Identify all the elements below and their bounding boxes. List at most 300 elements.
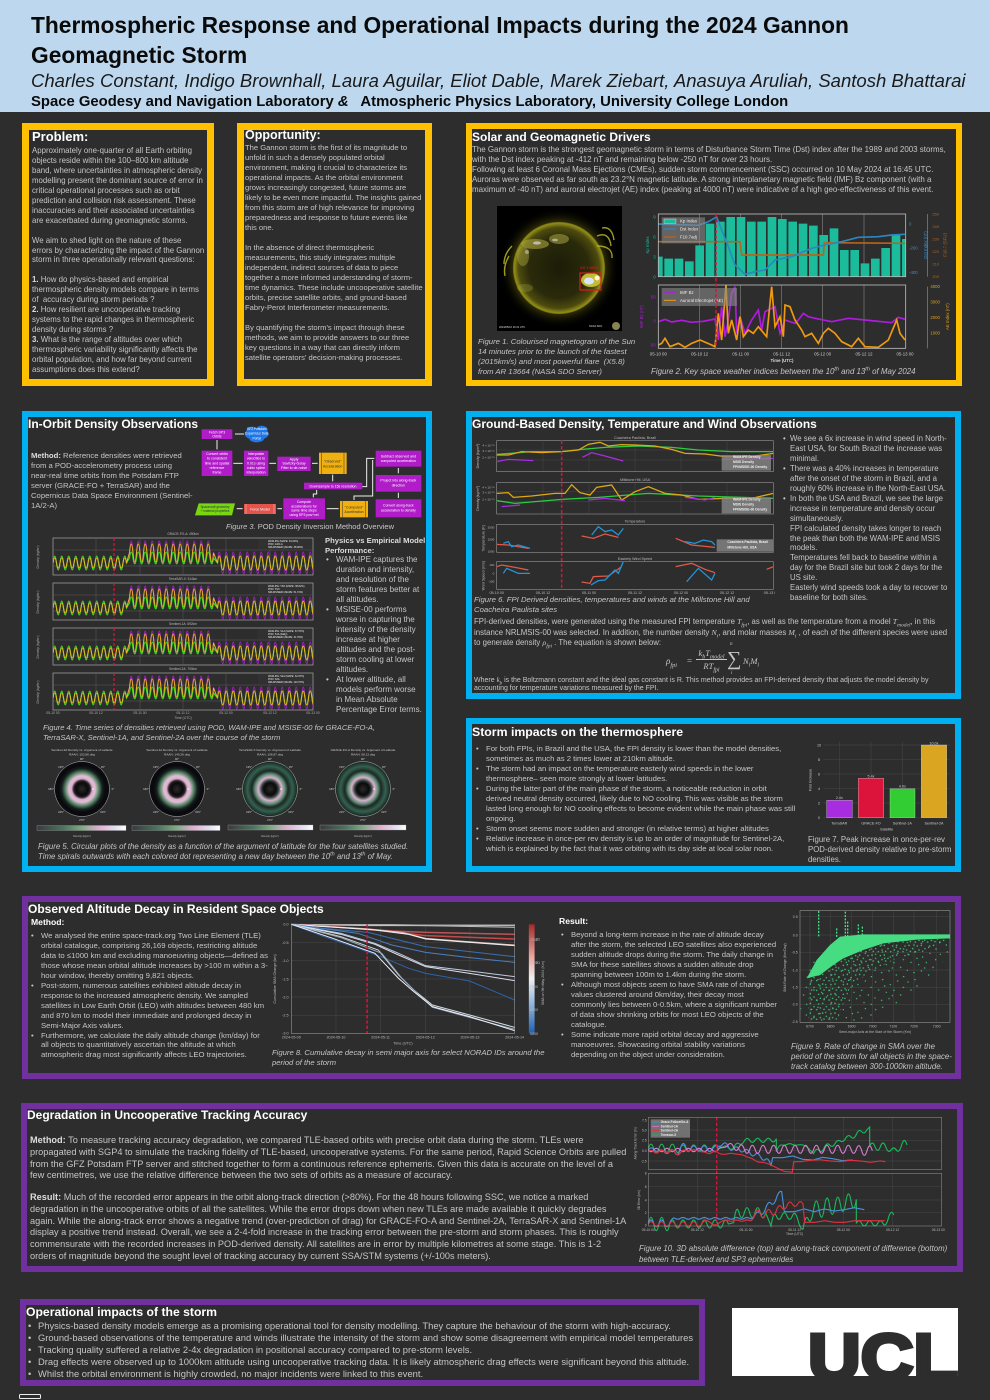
text: decay method: satellites in Low Earth Orbit (LEO) with altitudes between 480 km (41, 1001, 264, 1010)
figure 4: density time series: POD: S2A (268, 678, 280, 681)
figure 8: cumulative SMA change chart: 2024-05-11 (371, 1036, 390, 1040)
figure 5: polar density plots: 270° (174, 818, 180, 822)
figure 4 caption: Figure 4. Time series of densities retrieved using POD, WAM-IPE and MSISE-00 for GRACE-FO-A, (43, 723, 375, 732)
equation: FPI density: ρfpi (666, 656, 677, 669)
figure 3: POD inversion flowchart: Convert along-track (383, 504, 414, 508)
figure 4: density time series: 05-11 00 (133, 711, 147, 715)
text: method: 1A/2-A) (31, 501, 57, 510)
figure 6 caption (474, 595, 750, 614)
text: opportunity statement: grows increasingly congested, future storms are (245, 183, 406, 192)
text: problem statement: storm in three operationally relevant questions: (32, 255, 195, 264)
figure 5: polar density plots: 0° (112, 787, 114, 791)
figure 8 colour scale labels: SMA on 9th May 2024 (Km) (541, 961, 545, 1005)
text: decay result: Some indicate more rapid orbital decay and aggressive (571, 1030, 759, 1039)
figure 3: POD inversion flowchart: Acceleration (323, 464, 342, 468)
figure 7: peak density increase bar chart: 2.4x (836, 796, 843, 800)
bullet text: model performance: altitudes. (336, 665, 368, 674)
figure 8 colour scale labels: 7200 (530, 938, 538, 942)
figure 7 caption (808, 835, 951, 864)
figure 5 caption: Figure 5. Circular plots of the density as a function of the argument of latitude for the four satellites studied. (38, 842, 408, 851)
text: problem statement (32, 146, 204, 374)
figure 6: FPI density, temperature and wind chart: WAM-IPE Density (733, 497, 761, 501)
figure 5: polar density plots: 270° (360, 818, 366, 822)
figure 6: FPI density, temperature and wind chart (476, 436, 775, 595)
text: opportunity statement: likely to be even more impactful. The insights gained (245, 193, 421, 202)
panel: opportunity (237, 123, 432, 386)
text: storm impacts: Storm onset seems more sudden and stronger (in relative terms) at higher altitudes (486, 824, 769, 833)
figure 1 caption: 14 minutes prior to the launch of the fastest (478, 347, 627, 356)
text: storm impacts: ongoing. (486, 814, 516, 823)
figure 4: density time series: 05-11 12 (176, 711, 190, 715)
figure 5: polar density plots: 225° (339, 810, 345, 814)
text: opportunity statement: orbits, precise satellite orbits, and ground-based (245, 293, 407, 302)
text: FPI density method: to generate density ρfpi . The equation is shown below: (474, 638, 661, 650)
figure 5: polar density plots: 180° (329, 787, 335, 791)
figure 2: space weather indices chart: 05-10 00 (650, 351, 667, 356)
figure 10: tracking error chart: 2 (645, 1211, 647, 1215)
text: problem statement: errors by characterizing the impact of the Gannon (32, 246, 204, 255)
bullets: model performance: • (326, 605, 329, 614)
figure 9: SMA rate of change scatter: 6900 (848, 1025, 856, 1029)
text: solar drivers intro: The Gannon storm is the strongest geomagnetic storm in terms of Disturbance Storm Time (Dst) index after the 1989 and 2003 storms, (472, 145, 946, 154)
text: storm impacts: sometimes as much as 2 times lower at 210km altitude. (486, 754, 675, 763)
figure 2: space weather indices chart: 05-11 12 (773, 351, 791, 356)
figure 9: SMA rate of change scatter: 7000 (869, 1025, 877, 1029)
figure 4: density time series: TerraSAR-X: 514km (169, 577, 198, 581)
figure 4: density time series: Density (kg/m³) (36, 636, 40, 658)
bullets: model performance: • (326, 675, 329, 684)
text: decay method: all objects to quantitatively ascertain the altitude at which (41, 1040, 236, 1049)
figure 5: polar density plots: 315° (381, 810, 387, 814)
equation: FPI density: NiMi (743, 656, 759, 669)
text: ground-based findings: minimal. (790, 454, 819, 463)
text: opportunity statement: The Gannon storm is the first of its magnitude to (245, 143, 407, 152)
figure 2: space weather indices chart: 50 (651, 294, 656, 299)
figure 5: polar density plots: Sentinel-2A Density vs. Argument of Latitude (51, 748, 113, 752)
panel: storm impacts on the thermosphere (466, 718, 961, 872)
panel: ground-based observations: n (730, 642, 732, 647)
figure 2: space weather indices chart: 3000 (930, 300, 941, 305)
text: opportunity statement: satellite operators' decision-making processes. (245, 353, 402, 362)
figure 10 caption: between TLE-derived and SP3 ephemerides (639, 1255, 793, 1264)
figure 9: SMA rate of change scatter: 7100 (889, 1025, 897, 1029)
bullet text: model performance: altitudes and the post- (336, 645, 415, 654)
figure 3: POD inversion flowchart: Subtract observed and (381, 454, 416, 458)
panel: operational impacts (20, 1299, 705, 1386)
figure 3: POD inversion flowchart: velocities to (247, 457, 265, 461)
figure 10: tracking error chart: Sentinel-2A (661, 1129, 679, 1133)
figure 10: tracking error chart: Sentinel-1A (661, 1124, 679, 1128)
bullets: storm impacts: • (476, 744, 479, 753)
figure 4: density time series: POD: GFO-A (268, 543, 283, 546)
text: opportunity statement: unfold in such a densely populated orbital (245, 153, 385, 162)
text: opportunity statement: Fabry-Perot Interferometer measurements. (245, 303, 389, 312)
figure 10: tracking error chart: 05-11 12 (788, 1228, 801, 1232)
text: decay method: We analysed the entire space-track.org Two Line Element (TLE) (41, 931, 261, 940)
figure 7: peak density increase bar chart: 8 (818, 758, 820, 762)
figure 6: FPI density, temperature and wind chart: 3 × 10⁻¹² (482, 491, 494, 495)
figure 3: POD inversion flowchart: frame (213, 471, 222, 475)
figure 5: polar density plots: 45° (382, 765, 386, 769)
text: opportunity statement: In the absence of direct thermospheric (245, 243, 374, 252)
text: opportunity statement: independent, indirect sources of data to piece (245, 263, 398, 272)
text: method: Method: Reference densities were retrieved (31, 451, 182, 460)
figure 4: density time series: WAM-IPE (MAPE: 34.61%) (268, 540, 298, 543)
figure 2: space weather indices chart: 05-10 12 (691, 351, 709, 356)
text: equation note: Where kb is the Boltzmann constant and the ideal gas constant is R. This method provides an FPI-derived density that adjusts the model density by (474, 676, 928, 686)
figure 8 caption: period of the storm (272, 1058, 336, 1067)
text: decay result: manoeuvres. Showcasing orbital stability variations (571, 1040, 745, 1049)
figure 8 caption (272, 1048, 544, 1067)
bullets: ground-based findings: • (783, 494, 786, 503)
bullet text: model performance (336, 555, 422, 714)
figure 10: tracking error chart: 05-12 00 (837, 1228, 850, 1232)
figure 3: POD inversion flowchart: Interpolate (248, 452, 264, 456)
text: decay result (571, 930, 777, 1059)
figure 10: tracking error chart: Terrasar-X (661, 1133, 677, 1137)
text: problem statement: thermospheric density models compare in terms (32, 285, 199, 294)
figure 6: FPI density, temperature and wind chart: Millstone Hill, USA (620, 478, 651, 482)
panel: degradation in tracking accuracy (21, 1103, 963, 1272)
figure 9 caption: Figure 9. Rate of change in SMA over the (791, 1042, 935, 1051)
figure 3: POD inversion flowchart: Force Model (250, 507, 270, 511)
figure 10 caption (639, 1243, 947, 1265)
figure 8: cumulative SMA change chart: Cumulative SMA Change (km) (273, 954, 277, 1004)
bullet text: model performance: increase at higher (336, 635, 400, 644)
heading: storm impacts: Storm impacts on the thermosphere (472, 725, 683, 739)
figure 8: cumulative SMA change chart: 2024-05-14 (505, 1036, 524, 1040)
figure 3: POD inversion flowchart: Portal (253, 436, 261, 440)
figure 2: space weather indices chart: F10.7adj (680, 235, 697, 240)
figure 5: polar density plots: 135° (153, 765, 159, 769)
figure 6: FPI density, temperature and wind chart: 05-12 00 (674, 591, 688, 595)
text: equation note (474, 676, 928, 692)
figure 8: cumulative SMA change chart: 2024-05-09 (282, 1036, 301, 1040)
figure 2: space weather indices chart: IMF Bz (680, 290, 694, 295)
figure 2: space weather indices chart: 05-13 00 (896, 351, 914, 356)
text: decay result: values clustered around 0km/day, their decay most (571, 990, 744, 999)
figure 8 colour scale labels: 6900 (530, 1008, 538, 1012)
figure 8: cumulative SMA change chart: 2024-05-13 (460, 1036, 479, 1040)
bullets: decay result (561, 930, 564, 1039)
text: tracking result: display a positive trend instead. Overall, we see a 2-4-fold increase in the tracking error between the pre-storm and storm phases. This is roughly (30, 1227, 619, 1237)
text: ground-based findings: day for the Brazil site but took 2 days for the (790, 563, 942, 572)
bullets: decay method: • (31, 981, 34, 990)
figure 5: polar density plots: GRACE-FO-A Density vs. Argument of Latitude (331, 748, 396, 752)
text: decay method: Post-storm, numerous satellites exhibited altitude decay in (41, 981, 241, 990)
text: opportunity statement: methods, we aim to provide answers to our three (245, 333, 409, 342)
figure 3: POD inversion flowchart: Project into along-track (380, 479, 416, 483)
panel: ground-based observations (466, 411, 961, 699)
figure 8 colour scale labels: 7000 (530, 985, 538, 989)
figure 4: density time series: WAM-IPE: S2A (MAPE: 32.87%) (268, 675, 304, 678)
figure 8 colour scale labels: 7100 (530, 961, 538, 965)
figure 5: polar density plots: 270° (267, 818, 273, 822)
figure 10: tracking error chart: 2.5 (642, 1139, 647, 1143)
figure 7: peak density increase bar chart: Fold Increase (809, 769, 813, 791)
figure 8: cumulative SMA change chart: -3.0 (282, 1032, 289, 1036)
text: ground-based findings: simultaneously. (790, 514, 843, 523)
figure 5: polar density plots: 90° (175, 757, 179, 761)
figure 4: density time series: 05-10 00 (46, 711, 60, 715)
figure 3: POD inversion flowchart: computed acceleration (381, 459, 416, 463)
bullet text: model performance: MSISE-00 performs (336, 605, 407, 614)
figure 8: cumulative SMA change chart: 2024-05-10 (326, 1036, 345, 1040)
text: tracking result: again. While the along-track error shows a negative trend (over-prediction of drag) for GRACE-FO-A and Sentinel-2A, TerraSAR-X and Sentinel-1A (30, 1216, 626, 1226)
figure 7: peak density increase bar chart: Sentinel-2A (925, 821, 944, 825)
text: storm impacts: which is explained by the fact that it was orbiting with its day side at local solar noon. (486, 844, 773, 853)
text: decay result: commonly lies between 0-0.5km, where a significant number (571, 1000, 777, 1009)
figure 8: cumulative SMA change chart (273, 923, 540, 1046)
equation: FPI density: RTfpi (703, 661, 720, 674)
figure 2: space weather indices chart: 0 (653, 318, 656, 323)
figure 6: FPI density, temperature and wind chart: Density (kg/m³) (476, 486, 480, 511)
subheading: model performance (325, 536, 425, 555)
figure 4: density time series: Density (kg/m³) (36, 546, 40, 568)
figure 2: space weather indices chart: 0 (909, 222, 912, 227)
bullets: decay result: • (561, 1030, 564, 1039)
figure 2: space weather indices chart: 200 (932, 274, 940, 279)
figure 10: tracking error chart: 05-10 00 (642, 1228, 655, 1232)
figure 4: density time series: 05-13 00 (306, 711, 320, 715)
figure 6: FPI density, temperature and wind chart: 100 (489, 563, 495, 567)
figure 10: tracking error chart: 0.0 (642, 1149, 647, 1153)
figure 6: FPI density, temperature and wind chart: -100 (488, 580, 495, 584)
text: decay result: spanning between 100m to 1.4km during the storm. (571, 970, 746, 979)
bullets: operational impacts: • (28, 1368, 31, 1379)
figure 3: POD inversion flowchart: same time steps (291, 509, 317, 513)
figure 7 caption: POD-derived density relative to pre-storm (808, 845, 951, 854)
text: opportunity statement: together a more informed understanding of storm- (245, 273, 413, 282)
figure 5: polar density plots: Density (kg/m³) (168, 834, 186, 838)
figure 4: density time series: Density (kg/m³) (36, 681, 40, 703)
figure 3: POD inversion flowchart: reference (210, 466, 224, 470)
text: ground-based findings: baseline for both sites. (790, 593, 868, 602)
bullets: decay result: • (561, 930, 564, 939)
bullets: operational impacts: • (28, 1344, 31, 1355)
panel: solar and geomagnetic drivers (466, 123, 962, 386)
figure 7 caption: Figure 7. Peak increase in once-per-rev (808, 835, 945, 844)
figure 6: FPI density, temperature and wind chart: FPI/MSISE-00 Density (733, 465, 767, 469)
figure 2: space weather indices chart: 3 (653, 254, 656, 259)
text: tracking method (30, 1135, 626, 1180)
figure 10: tracking error chart: 05-13 00 (932, 1228, 945, 1232)
bullet text: model performance: all altitudes. (336, 595, 378, 604)
text: tracking method: propagated with SGP4 to simulate the tracking fidelity of TLE-based, uncooperative systems. For the same period, Rapid Science Orbits are pulled (30, 1147, 626, 1157)
figure 2: space weather indices chart: Auroral Electrojet (AE) (680, 298, 724, 303)
figure 6: FPI density, temperature and wind chart: Temperature (K) (481, 525, 485, 552)
figure 1: solar magnetogram image (497, 206, 622, 331)
heading: operational impacts: Operational impacts of the storm (26, 1305, 217, 1319)
figure 5: polar density plots: 0° (207, 787, 209, 791)
figure 2: space weather indices chart: F10.7 (SFU) (942, 233, 947, 257)
figure 5: polar density plots: 45° (289, 765, 293, 769)
bullets: storm impacts (476, 744, 479, 843)
figure 8: cumulative SMA change chart: 2024-05-12 (416, 1036, 435, 1040)
bullets: ground-based findings (783, 434, 786, 503)
figure 9: SMA rate of change scatter: SMA Rate of Change (Km/Day) (783, 943, 787, 992)
text: method: server (GRACE-FO + TerraSAR) and the (31, 481, 170, 490)
figure 7: peak density increase bar chart: Satellite (880, 827, 893, 831)
figure 4: density time series (36, 532, 320, 720)
figure 6: FPI density, temperature and wind chart: 1500 (488, 538, 495, 542)
text: problem statement: systems to the rapid changes in thermospheric (32, 315, 194, 324)
text: ground-based findings: In both the USA and Brazil, we see the large (790, 494, 943, 503)
text: tracking result: Result: Much of the recorded error appears in the orbit along-track direction (>80%). For the 48 hours following SSC, we notice a marked (30, 1192, 588, 1202)
text: problem statement: 3. What is the range of altitudes over which (32, 335, 182, 344)
text: opportunity statement: from this storm are of high relevance for improving (245, 203, 414, 212)
figure 8 colour scale labels: 6800 (530, 1032, 538, 1036)
text: ground-based findings: Temperatures fell back to baseline within a (790, 553, 937, 562)
text: problem statement: band, where uncertainties in atmospheric density (32, 166, 202, 175)
figure 2: space weather indices chart: 05-12 12 (855, 351, 873, 356)
text: ground-based findings: East USA, for South Brazil the increase was (790, 444, 942, 453)
figure 4: density time series: POD: S1A (Daily) (268, 633, 287, 636)
figure 3: POD inversion flowchart: cubic spline (247, 466, 265, 470)
figure 2: space weather indices chart: 6 (653, 234, 656, 239)
text: storm impacts: lasted long enough for NO cooling effects to become evident while the main phase was still (486, 804, 795, 813)
figure 8: cumulative SMA change chart: -0.5 (282, 941, 289, 945)
figure 2: space weather indices chart: -50 (649, 342, 656, 347)
bullet text: model performance: and resolution of the (336, 575, 409, 584)
figure 9 caption: track catalog between 300-1000km altitude. (791, 1062, 943, 1071)
figure 9: SMA rate of change scatter: -1.5 (792, 986, 798, 990)
text: problem statement: inaccuracies and their associated uncertainties (32, 206, 195, 215)
figure 4: density time series: GRACE-FO-A: 490km (167, 532, 199, 536)
heading: problem: Problem: (32, 129, 88, 144)
figure 3: POD inversion flowchart: Orbits (212, 434, 222, 438)
text: opportunity statement: this one. (245, 223, 274, 232)
figure 5: polar density plots: 45° (101, 765, 105, 769)
text: opportunity statement (245, 143, 423, 362)
bullets: operational impacts: • (28, 1332, 31, 1343)
figure 1: solar magnetogram image: AR 13664 (580, 265, 599, 270)
subheading: result: Result: (559, 916, 588, 926)
figure 3: POD inversion flowchart: Copernicus Data (245, 432, 269, 436)
text: decay result: depending on the object under consideration. (571, 1050, 725, 1059)
figure 9: SMA rate of change scatter: -2.0 (792, 1003, 798, 1007)
figure 9: SMA rate of change scatter: -0.5 (792, 951, 798, 955)
equation: FPI density: i (731, 671, 732, 676)
figure 3: POD inversion flowchart: direction (392, 483, 405, 487)
figure 5: polar density plots: 225° (58, 810, 64, 814)
figure 6: FPI density, temperature and wind chart: Coachiera Paulista, Brazil (727, 540, 768, 544)
text: decay method: Furthermore, we calculate the daily altitude change (km/day) for (41, 1031, 260, 1040)
text: problem statement: are exacerbated during geomagnetic storms. (32, 216, 188, 225)
text: decay result: sudden altitude drops during the storm. The daily change in (571, 950, 773, 959)
figure 10: tracking error chart: Time (UTC) (786, 1232, 803, 1236)
figure 5: polar density plots (36, 748, 406, 838)
figure 6 caption: Figure 6. FPI Derived densities, temperatures and winds at the Millstone Hill and (474, 595, 750, 604)
figure 10: tracking error chart: 6 (645, 1185, 647, 1189)
text: operational impacts: Whilst the orbital environment is highly crowded, no major incidents were linked to this event. (38, 1368, 423, 1379)
heading: degradation: Degradation in Uncooperative Tracking Accuracy (27, 1108, 307, 1122)
text: decay result: after the storm, the selected LEO satellites also experienced (571, 940, 776, 949)
figure 5: polar density plots: RAAN: 58.13 deg (351, 752, 375, 756)
text: ground-based findings: FPI calculated density takes longer to reach (790, 524, 941, 533)
figure 6: FPI density, temperature and wind chart: MSIS Density (733, 460, 754, 464)
text: solar drivers intro: Following at least 6 Coronal Mass Ejections (CMEs), sudden storm commencement (SSC) occurred on 10 May 2024 at 16:45 UTC. (472, 165, 933, 174)
figure 4: density time series: 05-12 00 (219, 711, 233, 715)
figure 8: cumulative SMA change chart: -2.5 (282, 1014, 289, 1018)
text: problem statement: We aim to shed light on the nature of these (32, 236, 181, 245)
text: problem statement: assumptions does this extend? (32, 365, 140, 374)
text: decay result: Although most objects seem to have SMA rate of change (571, 980, 765, 989)
text: problem statement: prediction and collision risk assessment. These (32, 196, 196, 205)
bullet text: model performance: Percentage Error terms. (336, 705, 422, 714)
figure 3: POD inversion flowchart: to consistent (207, 457, 227, 461)
text: physics vs empirical performance (325, 536, 425, 714)
bullet text: model performance: intensity of the density (336, 625, 416, 634)
text: decay method: Semi-Major Axis values. (41, 1021, 124, 1030)
figure 7: peak density increase bar chart: Sentinel-1A (893, 821, 912, 825)
figure 6: FPI density, temperature and wind chart: Easterly Wind Speed (618, 557, 652, 561)
figure 1 caption: Figure 1. Colourised magnetogram of the Sun (478, 337, 635, 346)
figure 3: POD inversion flowchart: Fetch SP3 (209, 430, 225, 434)
figure 2: space weather indices chart: Dst Index (nT) (923, 231, 928, 259)
figure 5: polar density plots: 135° (246, 765, 252, 769)
text: decay method: hour window, thereby omitting 9,821 objects. (41, 971, 194, 980)
text: ground-based findings (790, 434, 947, 602)
figure 6: FPI density, temperature and wind chart: 4 × 10⁻¹² (482, 444, 494, 448)
subheading: method: Method: (31, 917, 64, 927)
figure 7: peak density increase bar chart (809, 741, 950, 831)
figure 10: tracking error chart: 5.0 (642, 1128, 647, 1132)
figure 3: POD inversion flowchart: Spacecraft geometry (200, 505, 230, 509)
bullets: storm impacts: • (476, 824, 479, 833)
figure 9: SMA rate of change scatter: 0.0 (793, 933, 798, 937)
figure 2: space weather indices chart: AE Index (nT) (945, 303, 950, 330)
figure 6: FPI density, temperature and wind chart: WAM-IPE Density (733, 455, 761, 459)
figure 10 caption: Figure 10. 3D absolute difference (top) and along-track component of difference (bottom) (639, 1244, 947, 1253)
figure 4: density time series: Time (UTC) (174, 716, 192, 720)
bullets: decay result: • (561, 980, 564, 989)
figure 5: polar density plots: 315° (100, 810, 106, 814)
text: ground-based findings: increase in temperature and density occur (790, 504, 935, 513)
figure 5: polar density plots: TerraSAR-X Density vs. Argument of Latitude (239, 748, 301, 752)
text: operational impacts: Tracking quality suffered a relative 2-4x degradation in positional accuracy compared to pre-storm levels. (38, 1344, 472, 1355)
figure 5: polar density plots: Sentinel-1A Density vs. Argument of Latitude (146, 748, 208, 752)
figure 2: space weather indices chart: 05-12 00 (814, 351, 832, 356)
figure 3: POD inversion flowchart: Filter to de-noise (281, 466, 307, 470)
figure 10: tracking error chart (633, 1112, 955, 1238)
text: FPI density method (474, 617, 947, 650)
text: tracking method: Method: To measure tracking accuracy degradation, we compared TLE-based orbits with precise orbit data during the storm. TLEs were (30, 1135, 584, 1145)
figure 9: SMA rate of change scatter (783, 910, 950, 1034)
figure 6: FPI density, temperature and wind chart: FPI/MSISE-00 Density (733, 507, 767, 511)
figure 6: FPI density, temperature and wind chart: 05-12 12 (720, 591, 734, 595)
figure 2: space weather indices chart: 220 (932, 249, 940, 254)
figure 5: polar density plots: Density (kg/m³) (261, 834, 279, 838)
text: storm impacts: During the latter part of the main phase of the storm, a noticeable reduction in orbit (486, 784, 767, 793)
text: method (31, 451, 193, 510)
title: Geomagnetic Storm (31, 42, 247, 68)
text: problem statement: orbital population, and how far beyond current (32, 355, 192, 364)
text: tracking method: from the GFZ Potsdam FTP server and stitched together to form a continuous reference ephemeris. Given this data is accurate on the level of a (30, 1159, 613, 1169)
text: problem statement: objects reside within the 100–800 km altitude (32, 156, 189, 165)
figure 5: polar density plots: 225° (153, 810, 159, 814)
figure 10: tracking error chart: 05-10 12 (691, 1228, 704, 1232)
figure 10: tracking error chart: 3D Error (km) (637, 1190, 641, 1210)
text: problem statement: critical operational processes such as orbit (32, 186, 180, 195)
figure 8 colour scale labels (530, 938, 545, 1036)
text: opportunity statement: measurements, this study integrates multiple (245, 253, 395, 262)
text: storm impacts (486, 744, 795, 853)
figure 8: cumulative SMA change chart: 0.0 (283, 923, 289, 927)
figure 4: density time series: WAM-IPE: S1A (MAPE: 37.67%) (268, 630, 304, 633)
figure 4: density time series: NRLMSISE00 (MAPE: 51.72%) (268, 591, 303, 594)
figure 10: tracking error chart: 05-11 00 (740, 1228, 753, 1232)
